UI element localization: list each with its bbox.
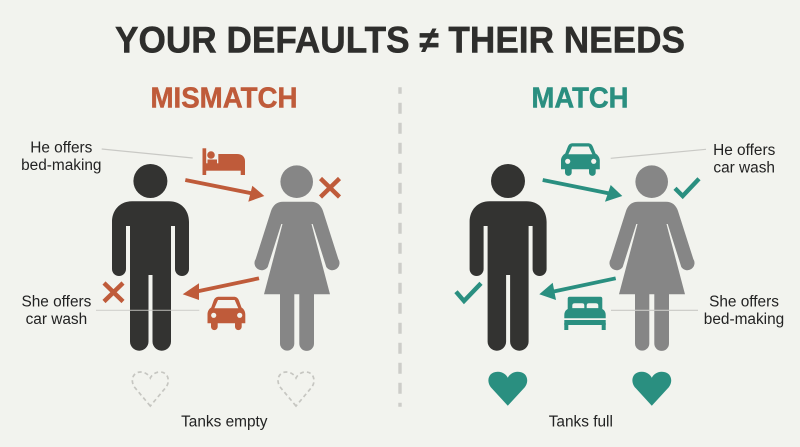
icon: car — [561, 143, 600, 176]
icon: car — [208, 297, 245, 330]
heading: match: MATCH — [532, 82, 628, 114]
label: she offers bed-making: She offers — [709, 294, 779, 311]
label: he offers bed-making: He offers — [30, 140, 93, 157]
icon: empty heart — [132, 372, 168, 406]
title: YOUR DEFAULTS ≠ THEIR NEEDS — [115, 20, 685, 61]
icon: empty heart — [278, 372, 314, 406]
panel: match — [456, 142, 784, 431]
label: he offers car wash: He offers — [713, 142, 776, 159]
arrow: he to she — [185, 180, 264, 202]
icon: full heart — [632, 372, 671, 406]
figure: man — [112, 164, 189, 351]
figure: woman — [254, 165, 340, 351]
figure: man — [470, 164, 547, 351]
icon: full heart — [488, 372, 527, 406]
icon: check — [456, 283, 481, 301]
figure: woman — [609, 165, 695, 351]
label: tanks full: Tanks full — [549, 414, 613, 431]
panel: mismatch — [21, 140, 340, 431]
icon: check — [675, 179, 699, 196]
label: she offers car wash: She offers — [21, 294, 92, 311]
label: he offers car wash: car wash — [713, 159, 775, 176]
arrow: she to he — [539, 278, 616, 300]
icon: cross — [320, 178, 340, 197]
label: he offers bed-making: bed-making — [21, 157, 102, 174]
heading: mismatch: MISMATCH — [150, 82, 298, 114]
arrow: he to she — [543, 180, 622, 202]
icon: cross — [104, 283, 123, 302]
label: she offers bed-making: bed-making — [704, 311, 784, 328]
icon: bed — [202, 148, 245, 175]
label: tanks empty: Tanks empty — [181, 414, 268, 431]
label: she offers car wash: car wash — [26, 311, 87, 328]
arrow: she to he — [183, 278, 259, 300]
icon: bed — [564, 297, 606, 330]
